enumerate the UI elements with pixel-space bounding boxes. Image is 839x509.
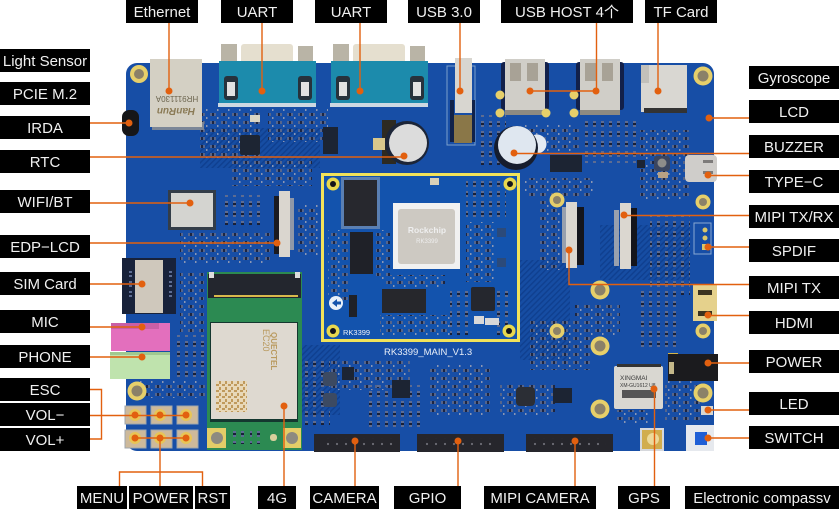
MIPI FPC connectors xyxy=(562,202,637,269)
label: PCIE M.2: PCIE M.2 xyxy=(13,86,77,103)
LED xyxy=(701,406,713,415)
label: BUZZER xyxy=(749,135,839,158)
board silkscreen title: RK3399_MAIN_V1.3 xyxy=(384,347,472,358)
label: GPS: GPS xyxy=(628,490,660,507)
label: GPIO: GPIO xyxy=(409,490,446,507)
EDP FPC connector xyxy=(274,191,294,257)
leader lines xyxy=(90,23,749,486)
label: MIPI CAMERA: MIPI CAMERA xyxy=(490,490,590,507)
label: Electronic compass xyxy=(685,486,839,509)
label: BUZZER: BUZZER xyxy=(764,139,824,156)
buzzer xyxy=(494,126,546,170)
RK3399 core module: Rockchip xyxy=(408,225,446,235)
RK3399 core module xyxy=(321,173,520,342)
USB host ports xyxy=(496,59,624,118)
label: MENU xyxy=(77,486,127,509)
label: Ethernet xyxy=(126,0,198,23)
label: POWER xyxy=(749,350,839,373)
pin header: GPIO xyxy=(417,434,504,452)
SPDIF header xyxy=(694,223,711,254)
Ethernet jack: HR911130A xyxy=(155,94,198,103)
label: SWITCH xyxy=(749,426,839,449)
left labels xyxy=(0,49,90,451)
label: Gyroscope: Gyroscope xyxy=(758,70,830,87)
inductor near Type-C xyxy=(654,156,670,178)
label: SPDIF xyxy=(749,239,839,262)
label: 4G: 4G xyxy=(267,490,287,507)
4G module on M.2 xyxy=(207,272,302,450)
GPS module xyxy=(614,364,663,409)
Type-C port xyxy=(685,155,717,182)
4G module on M.2: QUECTEL xyxy=(269,332,278,370)
GPS module: XM-GU1612 U8 xyxy=(620,383,656,389)
label: RST: RST xyxy=(198,490,228,507)
label: SPDIF: SPDIF xyxy=(772,243,816,260)
label: SIM Card xyxy=(0,272,90,295)
label: USB HOST: USB HOST 4个 xyxy=(515,4,619,21)
label: HDMI: HDMI xyxy=(775,315,813,332)
label: GPS xyxy=(618,486,670,509)
power jack xyxy=(668,353,718,381)
label: PCIE M.2 xyxy=(0,82,90,105)
label: RTC: RTC xyxy=(30,154,60,171)
label: LCD: LCD xyxy=(779,104,809,121)
Ethernet jack: HanRun xyxy=(157,105,195,116)
TF card slot xyxy=(641,65,687,113)
label: ESC: ESC xyxy=(30,382,61,399)
RTC coin cell holder xyxy=(373,120,429,165)
label: POWER button xyxy=(129,486,193,509)
label: POWER: POWER xyxy=(766,354,822,371)
label: TF Card xyxy=(645,0,717,23)
4G module on M.2: EC20 xyxy=(261,329,271,352)
label: Ethernet: Ethernet xyxy=(134,4,191,21)
circuit board xyxy=(126,63,714,451)
label: VOL+: VOL+ xyxy=(26,432,65,449)
label: MIPI TX/RX xyxy=(749,205,839,228)
label: WIFI/BT xyxy=(0,190,90,213)
label: EDP-LCD xyxy=(0,235,90,258)
label: Light Sensor: Light Sensor xyxy=(3,53,87,70)
label: IRDA: IRDA xyxy=(27,120,63,137)
label: VOL-: VOL− xyxy=(26,407,65,424)
label: MENU: MENU xyxy=(80,490,124,507)
label: VOL+ xyxy=(0,428,90,451)
label: SIM Card: SIM Card xyxy=(13,276,77,293)
label: 4G xyxy=(258,486,296,509)
small chips xyxy=(240,115,645,407)
mounting holes xyxy=(128,65,712,418)
PHONE jack xyxy=(110,352,170,379)
label: SWITCH: SWITCH xyxy=(764,430,824,447)
label: VOL- xyxy=(0,403,90,426)
label: USB HOST xyxy=(501,0,633,23)
label: MIPI TX xyxy=(749,276,839,299)
SIM card slot xyxy=(122,258,176,314)
GPS module: XINGMAI xyxy=(620,375,648,382)
label: Electronic compass: Electronic compassv xyxy=(693,490,831,507)
label: POWER button: POWER xyxy=(133,490,189,507)
label: TYPE-C xyxy=(749,170,839,193)
label: LED: LED xyxy=(779,396,809,413)
label: RST xyxy=(195,486,230,509)
IRDA receiver xyxy=(122,110,139,136)
label: MIPI TX/RX: MIPI TX/RX xyxy=(755,209,833,226)
pin header: camera xyxy=(314,434,400,452)
USB 3.0 connector xyxy=(447,58,475,145)
top labels xyxy=(126,0,717,23)
label: USB 3.0: USB 3.0 xyxy=(416,4,472,21)
label: LCD xyxy=(749,100,839,123)
label: RTC xyxy=(0,150,90,173)
GPS SMA connector xyxy=(640,428,664,451)
label: Gyroscope xyxy=(749,66,839,89)
tactile buttons xyxy=(125,406,198,448)
label: MIPI TX: MIPI TX xyxy=(767,280,821,297)
label: ESC xyxy=(0,378,90,401)
label: PHONE: PHONE xyxy=(18,349,72,366)
label: WIFI/BT: WIFI/BT xyxy=(18,194,72,211)
label: UART 2 xyxy=(315,0,387,23)
label: MIPI CAMERA xyxy=(484,486,596,509)
Ethernet jack xyxy=(150,59,204,130)
label: UART 2: UART xyxy=(331,4,371,21)
label: HDMI xyxy=(749,311,839,334)
label: UART 1: UART xyxy=(237,4,277,21)
label: IRDA xyxy=(0,116,90,139)
label: PHONE xyxy=(0,345,90,368)
right labels xyxy=(749,66,839,449)
RK3399 core module: RK3399 xyxy=(343,328,370,337)
label: USB 3.0 xyxy=(408,0,480,23)
WIFI/BT module xyxy=(168,190,216,230)
label: MIC: MIC xyxy=(31,314,59,331)
UART connector 1 xyxy=(218,44,316,107)
leader line dots xyxy=(126,88,712,444)
RK3399 core module: RK3399 xyxy=(416,239,439,245)
pin header: MIPI camera xyxy=(526,434,613,452)
HDMI port xyxy=(693,285,717,321)
label: GPIO xyxy=(394,486,461,509)
UART connector 2 xyxy=(330,44,428,107)
label: TYPE-C: TYPE−C xyxy=(765,174,824,191)
label: EDP-LCD: EDP−LCD xyxy=(10,239,80,256)
label: TF Card: TF Card xyxy=(653,4,709,21)
label: LED xyxy=(749,392,839,415)
label: UART 1 xyxy=(221,0,293,23)
power switch xyxy=(686,425,714,451)
label: MIC xyxy=(0,310,90,333)
MIC jack xyxy=(111,323,170,351)
label: Light Sensor xyxy=(0,49,90,72)
label: CAMERA: CAMERA xyxy=(312,490,377,507)
bottom labels xyxy=(77,486,839,509)
label: CAMERA xyxy=(310,486,379,509)
